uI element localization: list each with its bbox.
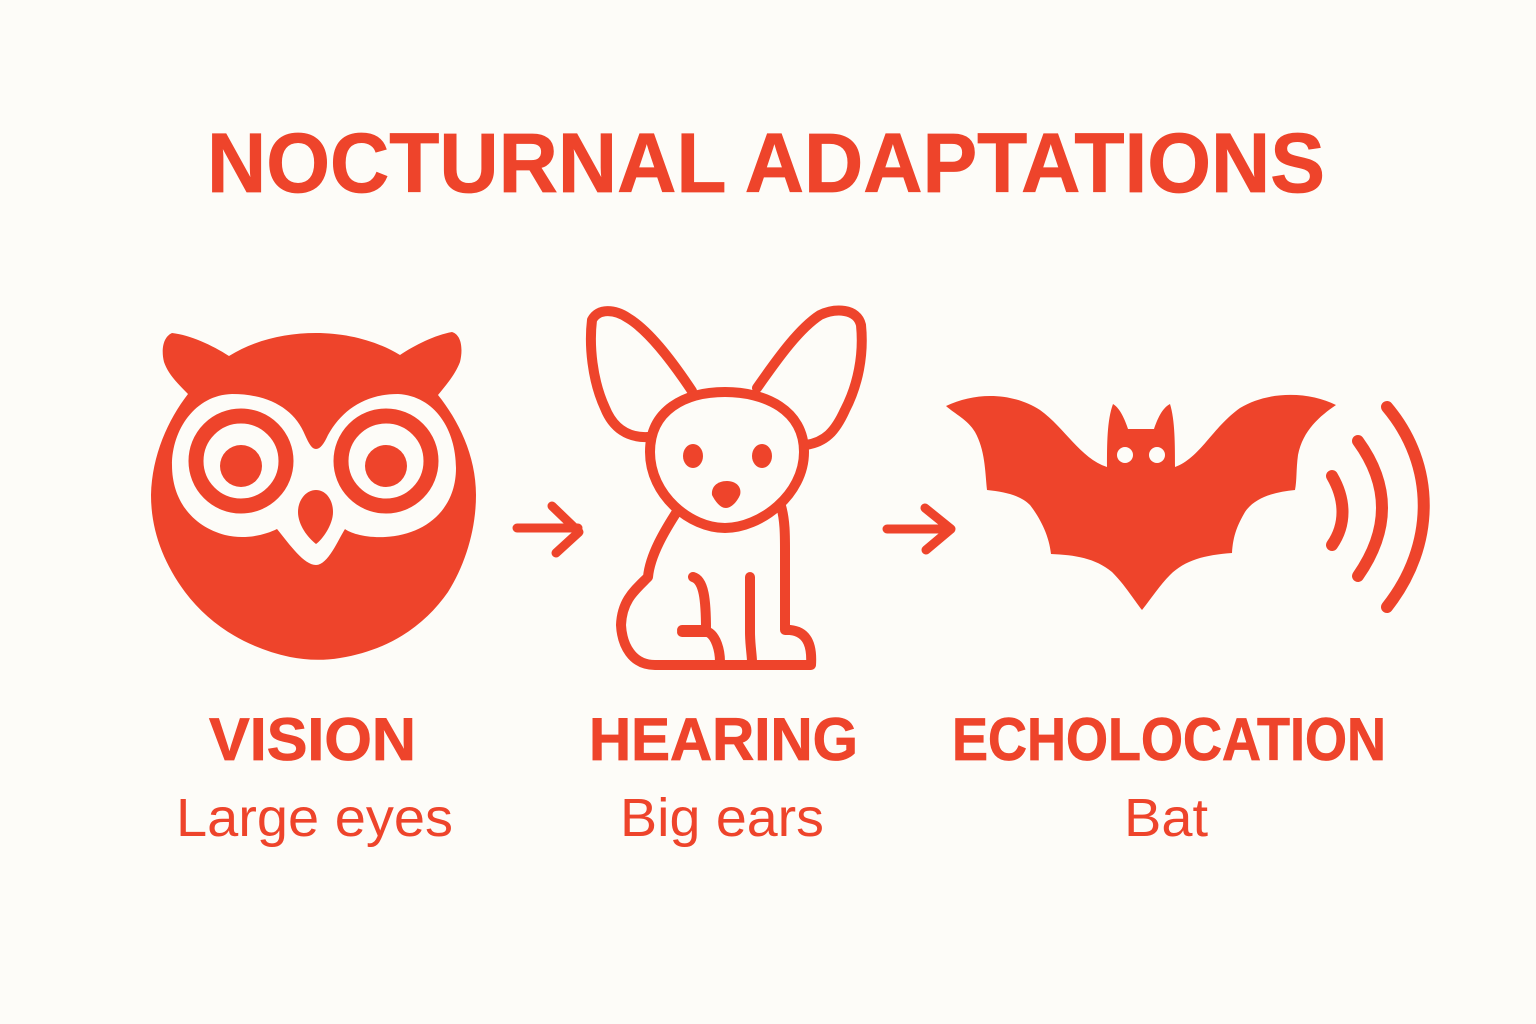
dog face [683,444,772,508]
legs [682,577,752,662]
head [650,392,804,528]
left ear [591,311,692,437]
label: echolocation: ECHOLOCATION [952,706,1386,773]
body and tail [621,506,811,665]
icon: sound waves [1332,407,1424,607]
icon: bat [946,395,1336,610]
icon: owl [151,332,476,660]
caption: large eyes: Large eyes [176,788,453,848]
icon: big-eared dog [591,311,862,665]
arrow: vision to hearing [517,506,579,553]
caption: big ears: Big ears [620,788,824,848]
label: hearing: HEARING [589,706,858,773]
caption: bat: Bat [1124,788,1208,848]
right ear [757,311,862,445]
label: vision: VISION [209,706,416,773]
title: NOCTURNAL ADAPTATIONS [207,116,1325,210]
arrow: hearing to echolocation [887,508,951,550]
